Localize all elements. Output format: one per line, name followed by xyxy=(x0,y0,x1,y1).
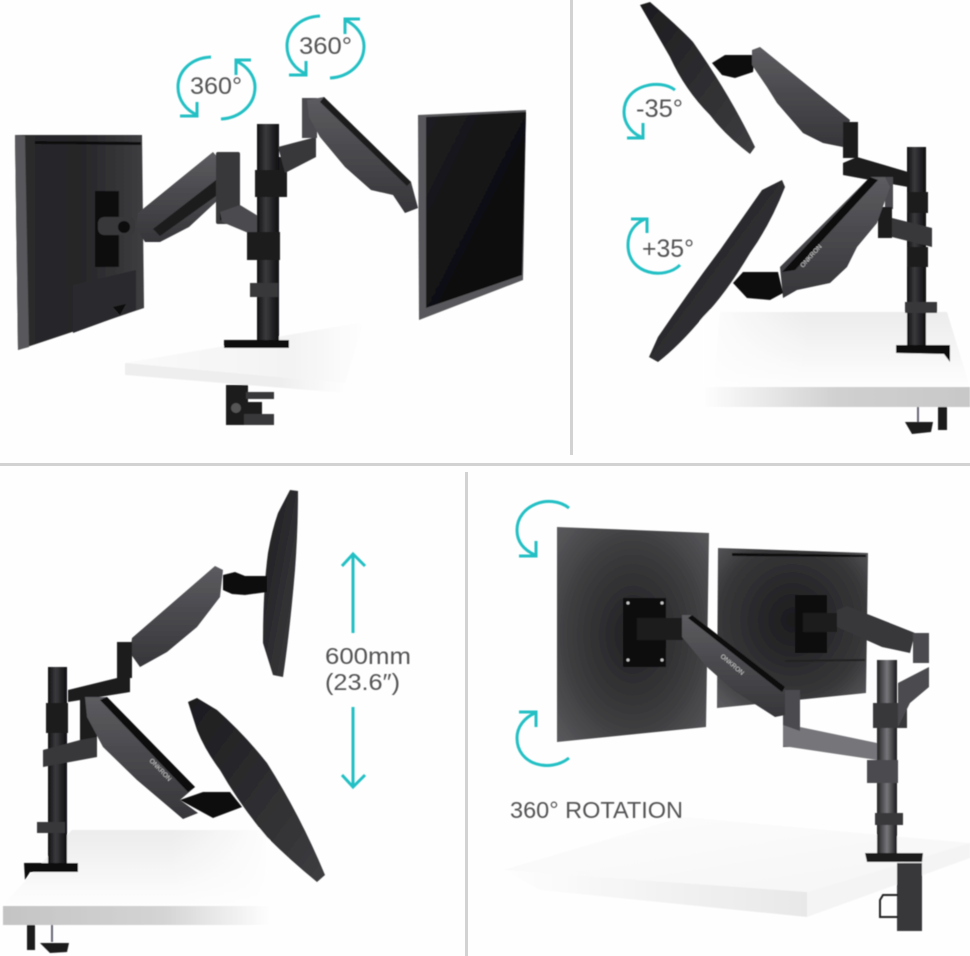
label: -35: -35° xyxy=(636,95,683,123)
lower arm xyxy=(733,177,932,300)
arrow: tilt up xyxy=(624,84,675,138)
monitor pole xyxy=(24,667,78,880)
brand logo: ONKRON xyxy=(719,653,745,677)
far arm xyxy=(837,606,929,727)
right gas spring arm xyxy=(278,97,418,213)
desk xyxy=(125,322,364,393)
left monitor rear xyxy=(15,135,144,350)
arrow: up xyxy=(342,554,365,633)
panel: 360 degree swivel xyxy=(15,16,526,425)
label: 360: 360° xyxy=(299,33,352,60)
lower monitor xyxy=(188,698,325,882)
monitor pole xyxy=(224,124,289,348)
upper monitor xyxy=(263,490,298,677)
desk xyxy=(503,817,970,917)
panel: 360 rotation xyxy=(503,501,970,931)
label: 23.6 inches: (23.6″) xyxy=(325,669,400,695)
near arm xyxy=(682,615,877,760)
brand logo: ONKRON xyxy=(799,243,824,269)
rotation arrows xyxy=(178,57,255,119)
monitor pole xyxy=(896,147,950,362)
rear monitor xyxy=(717,548,868,708)
arrow: rotate top xyxy=(517,501,569,556)
left gas spring arm xyxy=(136,152,268,242)
arrow: down xyxy=(342,707,365,787)
label: 360 rotation: 360° ROTATION xyxy=(510,797,683,823)
label: 360: 360° xyxy=(190,73,242,100)
upper monitor xyxy=(640,2,755,154)
rotation arrows xyxy=(287,16,364,78)
upper arm xyxy=(712,47,908,187)
front monitor xyxy=(557,527,709,742)
arrow: rotate bottom xyxy=(517,712,569,765)
desk xyxy=(3,828,270,925)
upper arm xyxy=(68,566,267,702)
desk xyxy=(700,310,970,407)
brand logo: ONKRON xyxy=(148,758,173,783)
clamp hardware xyxy=(905,407,947,434)
clamp hardware xyxy=(27,925,69,953)
right monitor front xyxy=(418,110,526,320)
label: 600mm: 600mm xyxy=(325,643,411,669)
label: +35: +35° xyxy=(642,235,694,263)
panel: height adjustment xyxy=(3,490,411,953)
desk clamp xyxy=(880,863,922,931)
desk clamp xyxy=(226,385,274,425)
arrow: tilt down xyxy=(628,219,680,273)
panel: tilt xyxy=(624,2,970,434)
lower arm xyxy=(43,697,242,819)
monitor pole xyxy=(865,660,923,862)
lower monitor xyxy=(649,180,785,362)
